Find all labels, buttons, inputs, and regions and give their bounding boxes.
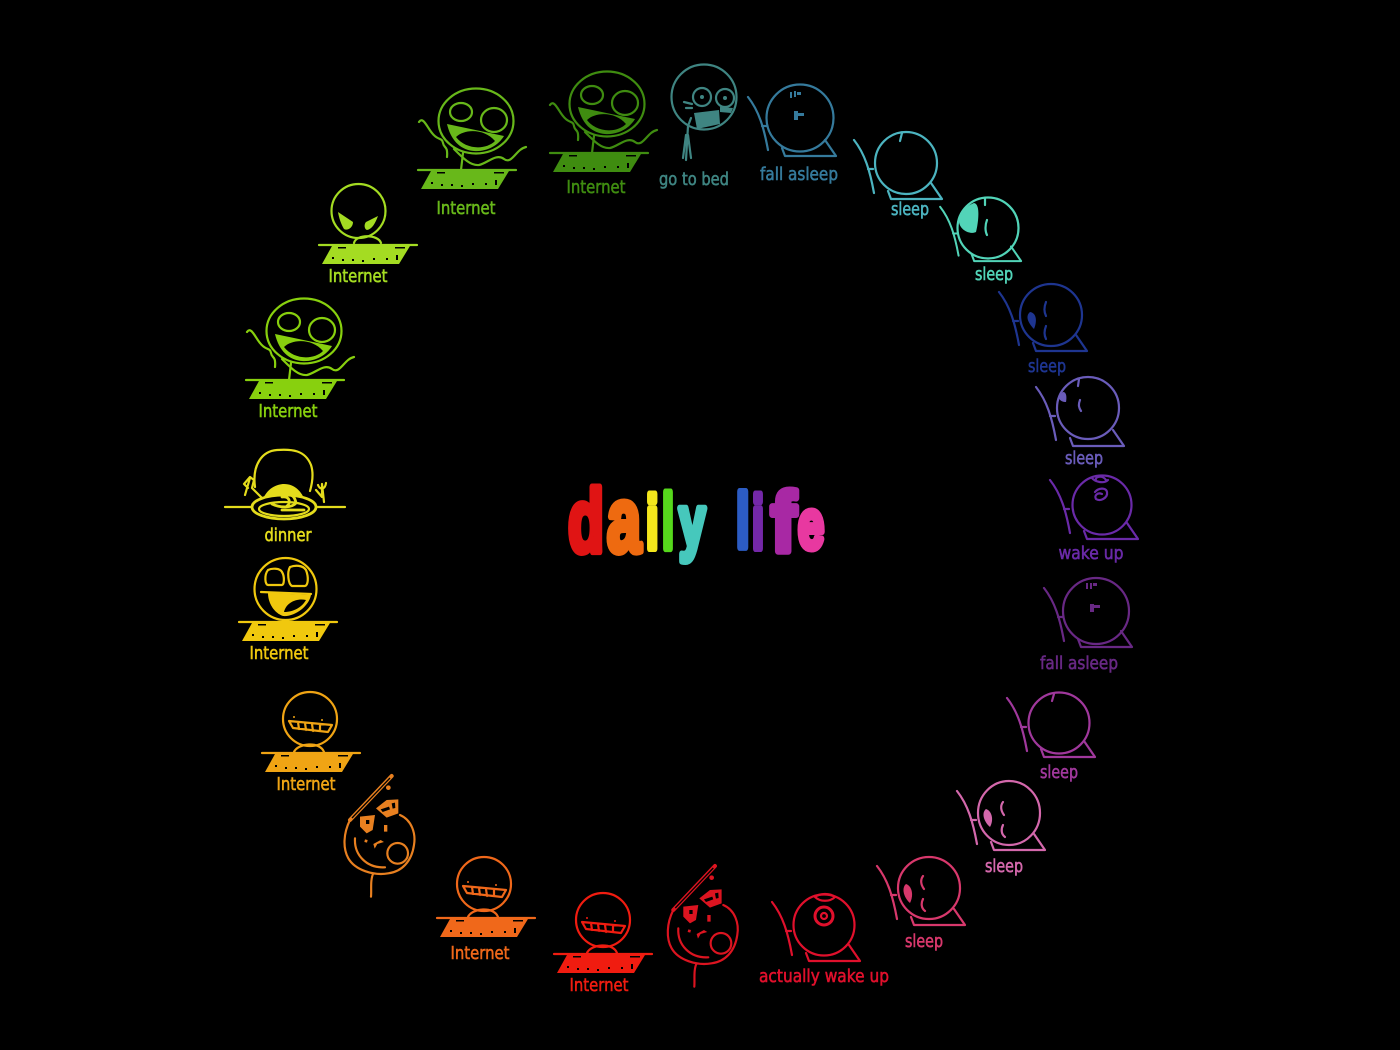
figure: actually wake up: actually wake up bbox=[759, 966, 889, 987]
figure: sleep rose: sleep bbox=[905, 931, 943, 952]
title: daily life: e bbox=[798, 486, 824, 564]
figure: sleep cyan bbox=[854, 132, 942, 220]
figure: fall asleep purple bbox=[1040, 578, 1132, 674]
figure: Internet yellow: Internet bbox=[250, 643, 308, 664]
title: daily life bbox=[568, 470, 824, 572]
figure: Internet dark green: Internet bbox=[566, 177, 626, 198]
figure: sleep pink: sleep bbox=[985, 856, 1023, 877]
figure: Internet angry bbox=[319, 184, 417, 287]
figure: Internet angry: Internet bbox=[328, 266, 388, 287]
figure: fall asleep blue bbox=[748, 84, 838, 185]
figure: sleep violet: sleep bbox=[1065, 448, 1103, 469]
figure: go to bed bbox=[659, 64, 736, 190]
figure: smashed head orange bbox=[344, 776, 414, 897]
figure: Internet dark green bbox=[550, 72, 657, 198]
title: daily life: y bbox=[679, 482, 705, 562]
title: daily life: f bbox=[771, 476, 797, 570]
title: daily life: l bbox=[662, 478, 674, 566]
figure: sleep teal: sleep bbox=[975, 264, 1013, 285]
title: daily life: d bbox=[568, 470, 604, 570]
figure: sleep rose bbox=[877, 857, 965, 952]
figure: actually wake up bbox=[759, 894, 889, 987]
figure: sleep magenta bbox=[1007, 692, 1095, 783]
figure: Internet orange: Internet bbox=[450, 943, 510, 964]
figure: go to bed: go to bed bbox=[659, 169, 729, 190]
title: daily life: a bbox=[607, 470, 642, 572]
figure: Internet lime bbox=[246, 298, 354, 422]
figure: dinner bbox=[225, 450, 345, 546]
figure: sleep navy bbox=[999, 284, 1087, 377]
figure: sleep cyan: sleep bbox=[891, 199, 929, 220]
figure: sleep pink bbox=[957, 781, 1045, 877]
figure: Internet red: Internet bbox=[570, 975, 628, 996]
figure: wake up bbox=[1050, 476, 1138, 564]
figure: sleep violet bbox=[1036, 377, 1124, 469]
figure: Internet amber bbox=[262, 692, 360, 795]
figure: fall asleep blue: fall asleep bbox=[760, 164, 838, 185]
title: daily life: l bbox=[736, 478, 750, 564]
figure: wake up: wake up bbox=[1058, 543, 1124, 564]
title: daily life: i bbox=[752, 480, 764, 564]
figure: smashed head red bbox=[668, 866, 738, 987]
figure: Internet yellow bbox=[239, 558, 337, 664]
figure: fall asleep purple: fall asleep bbox=[1040, 653, 1118, 674]
figure: Internet red bbox=[554, 893, 652, 996]
figure: sleep magenta: sleep bbox=[1040, 762, 1078, 783]
figure: Internet amber: Internet bbox=[276, 774, 336, 795]
figure: sleep teal bbox=[940, 198, 1021, 285]
title: daily life: i bbox=[646, 480, 658, 564]
figure: Internet orange bbox=[437, 857, 535, 964]
figure: dinner: dinner bbox=[264, 525, 312, 546]
figure: Internet bright green: Internet bbox=[436, 198, 496, 219]
figure: sleep navy: sleep bbox=[1028, 356, 1066, 377]
figure: Internet lime: Internet bbox=[258, 401, 318, 422]
figure: Internet bright green bbox=[418, 88, 526, 219]
